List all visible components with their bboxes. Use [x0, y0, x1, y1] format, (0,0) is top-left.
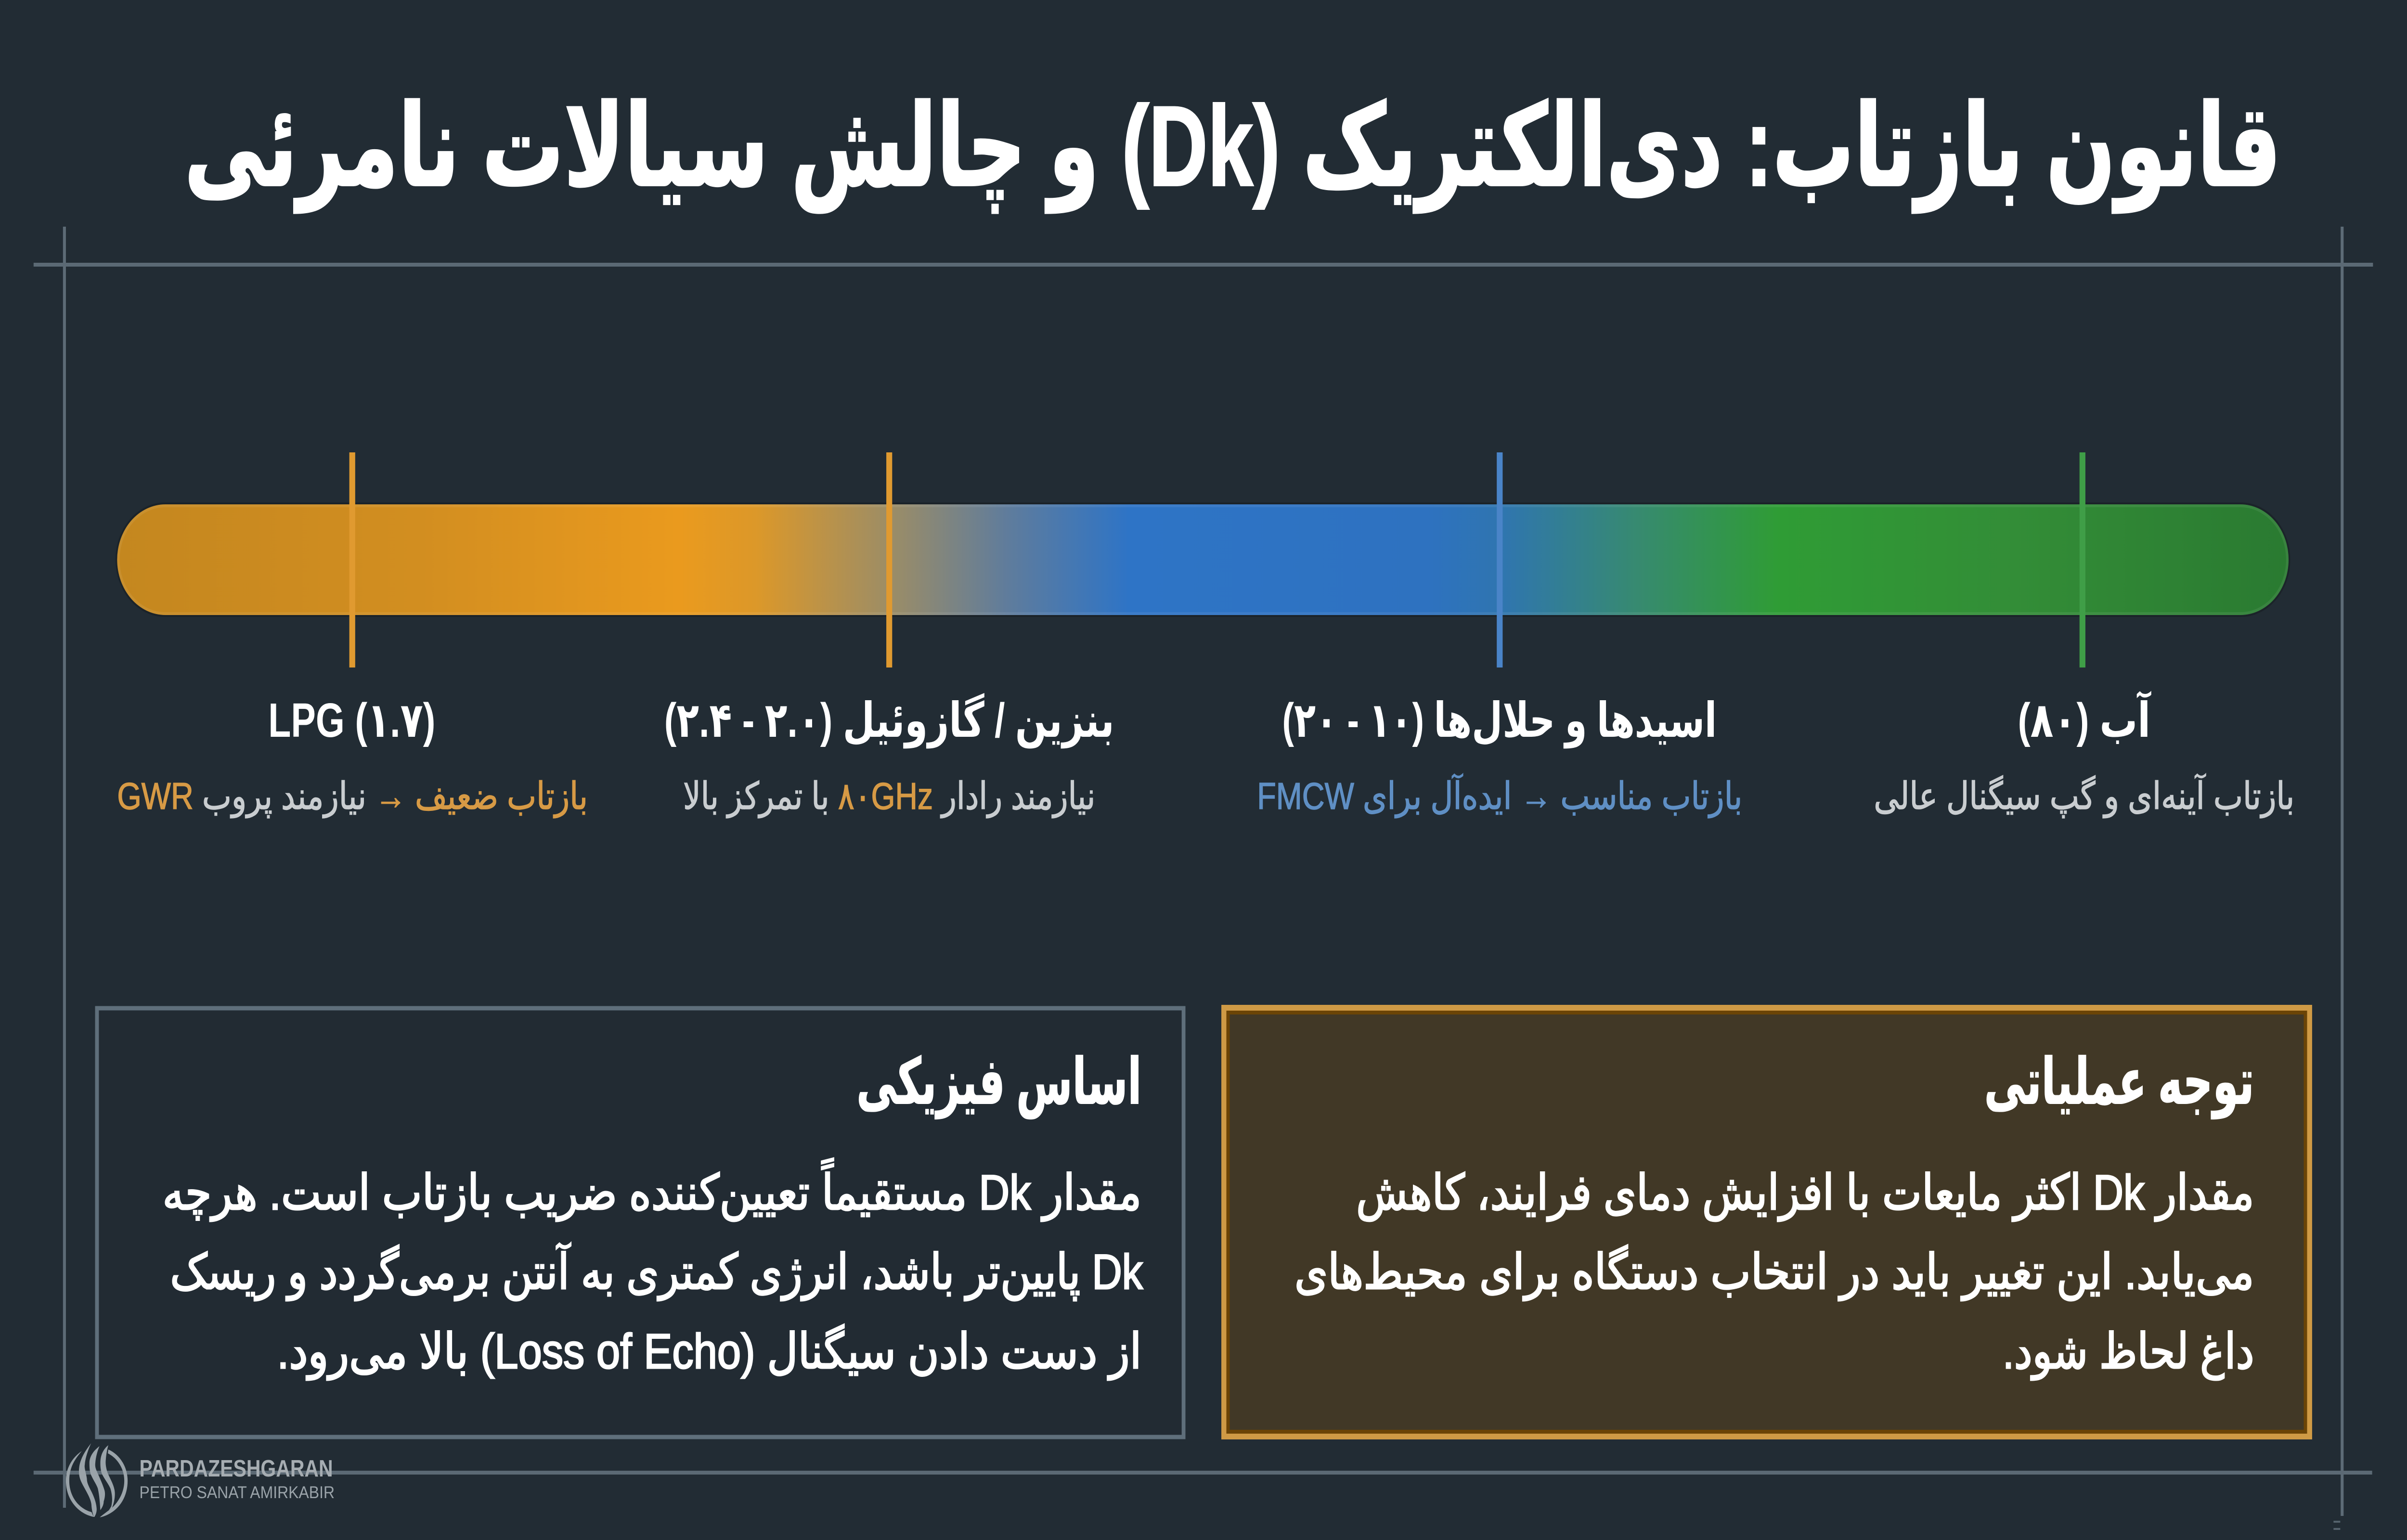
note: LPG: بازتاب ضعیف → نیازمند پروب GWR — [117, 775, 588, 818]
note: gasoline: نیازمند رادار ۸۰GHz با تمرکز بالا — [683, 775, 1095, 818]
note: water: بازتاب آینه‌ای و گپ سیگنال عالی — [1874, 773, 2294, 818]
heading: operational note: توجه عملیاتی — [1984, 1047, 2254, 1119]
icon: flame mark — [66, 1443, 128, 1517]
dielectric spectrum bar — [116, 452, 2291, 667]
body: physical basis: از دست دادن سیگنال (Loss of Echo) بالا می‌رود. — [277, 1324, 1141, 1381]
panel: operational note — [1224, 1008, 2310, 1437]
tick: water — [2080, 452, 2085, 667]
panel: physical basis — [97, 1008, 1184, 1437]
tick: acids — [1497, 452, 1502, 667]
label: LPG: LPG (۱.۷) — [268, 693, 435, 747]
label: gasoline: بنزین / گازوئیل (۲.۰ - ۲.۴) — [664, 693, 1114, 749]
tick: LPG — [349, 452, 355, 667]
tick: gasoline — [886, 452, 892, 667]
body: physical basis: مقدار Dk مستقیماً تعیین‌کننده ضریب بازتاب است. هرچه — [163, 1158, 1141, 1222]
logo text: company name: PARDAZESHGARAN — [140, 1455, 333, 1482]
body: operational note: می‌یابد. این تغییر باید در انتخاب دستگاه برای محیط‌های — [1294, 1245, 2254, 1301]
body: operational note — [1294, 1165, 2254, 1381]
body: physical basis — [163, 1158, 1143, 1381]
label: water: آب (۸۰) — [2018, 690, 2151, 747]
note: acids: بازتاب مناسب → ایده‌آل برای FMCW — [1257, 773, 1742, 818]
logo — [66, 1443, 335, 1517]
heading: physical basis: اساس فیزیکی — [856, 1047, 1141, 1119]
body: physical basis: Dk پایین‌تر باشد، انرژی کمتری به آنتن برمی‌گردد و ریسک — [170, 1242, 1143, 1301]
body: operational note: مقدار Dk اکثر مایعات با افزایش دمای فرایند، کاهش — [1356, 1165, 2254, 1222]
body: operational note: داغ لحاظ شود. — [2003, 1324, 2254, 1381]
logo text: subtitle: PETRO SANAT AMIRKABIR — [140, 1483, 335, 1502]
label: acids: اسیدها و حلال‌ها (۱۰ - ۲۰) — [1282, 693, 1717, 749]
